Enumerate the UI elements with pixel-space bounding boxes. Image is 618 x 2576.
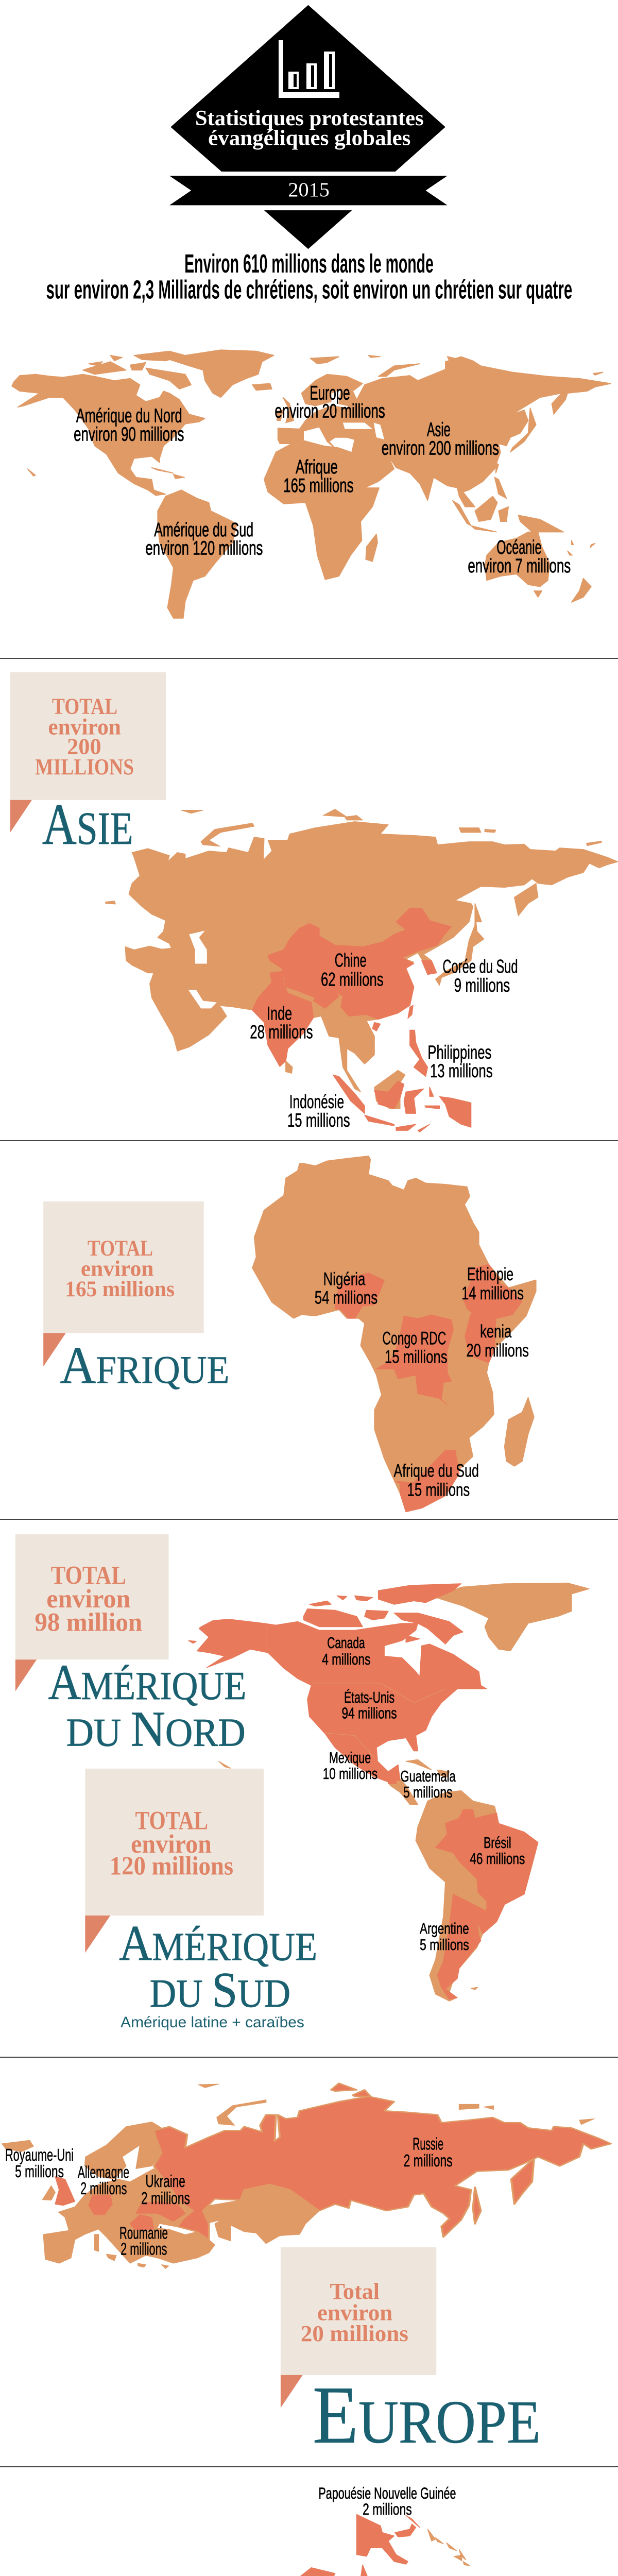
country labels: Amériques: 4 millions	[322, 1651, 370, 1669]
total box: Asie	[10, 672, 166, 833]
panel: Asie	[10, 672, 618, 1132]
world map shapes	[12, 350, 611, 618]
subheading: Amérique latine + caraïbes	[121, 2013, 304, 2031]
country labels: Afrique: 15 millions	[385, 1347, 448, 1367]
continent labels	[74, 382, 571, 577]
continent labels: Amérique du Sud	[154, 519, 253, 540]
panel: Afrique: 20 millions	[466, 1340, 529, 1361]
continent labels: environ 120 millions	[145, 537, 263, 559]
country labels: Europe: Ukraine	[145, 2172, 185, 2191]
country labels: Afrique: Afrique du Sud	[394, 1461, 479, 1481]
heading: Amérique du Sud: AMÉRIQUE	[119, 1915, 317, 1971]
country labels: Amériques: Brésil	[484, 1834, 511, 1852]
country labels: Asie: 62 millions	[321, 969, 384, 990]
total box: Amérique du Nord: environ	[46, 1584, 130, 1613]
country labels: Amériques: États-Unis	[344, 1689, 394, 1706]
country labels: Océanie: 2 millions	[363, 2501, 412, 2519]
country labels: Afrique: 15 millions	[407, 1480, 470, 1500]
country labels: Amériques: 94 millions	[342, 1705, 397, 1722]
country labels: Asie	[250, 950, 518, 1131]
title: Statistiques protestantes	[195, 106, 424, 130]
panel: Afrique	[43, 1156, 536, 1512]
country labels: Asie: 28 millions	[250, 1021, 313, 1043]
total box: Amérique du Nord: 98 million	[35, 1607, 142, 1637]
total box: Asie: MILLIONS	[35, 755, 134, 779]
total box: Amérique du Nord	[15, 1534, 169, 1691]
panel: world map	[12, 350, 611, 618]
country labels: Amériques: 5 millions	[420, 1936, 469, 1954]
heading: Amérique du Nord: AMÉRIQUE	[48, 1654, 246, 1710]
country labels: Europe: Allemagne	[78, 2163, 129, 2182]
total box: Amérique du Sud	[85, 1769, 264, 1953]
country labels: Europe: 2 millions	[80, 2179, 127, 2198]
country labels: Océanie: Papouésie Nouvelle Guinée	[318, 2485, 456, 2503]
country labels: Asie: Philippines	[427, 1042, 491, 1063]
icon: bar chart	[279, 40, 339, 98]
continent labels: environ 90 millions	[74, 423, 184, 445]
country labels: Asie: Chine	[335, 950, 367, 971]
total box: Afrique: environ	[81, 1257, 154, 1281]
total box: Amérique du Sud: 120 millions	[110, 1851, 233, 1880]
country labels: Europe: 2 millions	[141, 2189, 190, 2208]
total box: Asie: 200	[67, 734, 101, 759]
total box: Afrique: TOTAL	[88, 1236, 153, 1261]
total box: Afrique	[43, 1201, 204, 1366]
total box: Amérique du Sud: TOTAL	[135, 1806, 208, 1835]
country labels: Amériques	[322, 1634, 525, 1954]
country labels: Europe: 5 millions	[15, 2162, 64, 2181]
total box: Europe: Total	[330, 2279, 380, 2304]
continent labels: Océanie	[496, 536, 542, 558]
country labels: Amériques: Canada	[327, 1634, 365, 1652]
country labels: Europe	[5, 2134, 453, 2259]
bottom triangle	[264, 210, 352, 249]
Europe map	[2, 2083, 611, 2268]
country labels: Océanie	[299, 2485, 533, 2576]
panel: Amériques	[15, 1534, 589, 2031]
total box: Asie: environ	[48, 715, 121, 740]
country labels: Asie: 13 millions	[430, 1060, 493, 1082]
heading: Amérique du Sud	[119, 1915, 317, 2018]
panel: Océanie	[8, 2485, 563, 2576]
country labels: Europe: Roumanie	[119, 2224, 168, 2243]
panel: Afrique: 14 millions	[461, 1283, 524, 1303]
heading: Afrique: AFRIQUE	[60, 1335, 229, 1395]
country labels: Asie: Indonésie	[289, 1091, 344, 1113]
country labels: Afrique: Congo RDC	[382, 1328, 446, 1349]
continent labels: Asie	[427, 418, 451, 440]
country labels: Afrique: kenia	[480, 1321, 512, 1342]
continent labels: environ 20 millions	[274, 400, 385, 422]
heading: Amérique du Sud: DU SUD	[150, 1961, 290, 2018]
country labels: Amériques: 46 millions	[470, 1850, 525, 1868]
total box: Afrique: 165 millions	[65, 1277, 175, 1301]
total box: Europe: environ	[317, 2300, 392, 2325]
country labels: Afrique: 54 millions	[315, 1287, 377, 1308]
country labels: Afrique: Ethiopie	[467, 1264, 513, 1284]
country labels: Afrique: Nigéria	[323, 1269, 366, 1290]
continent labels: Amérique du Nord	[76, 405, 182, 427]
total box: Europe	[281, 2247, 436, 2408]
heading: Asie: ASIE	[42, 792, 133, 857]
year: 2015	[288, 179, 330, 201]
heading: Amérique du Nord: DU NORD	[66, 1701, 246, 1757]
Oceania map	[211, 2515, 563, 2576]
title: évangéliques globales	[208, 125, 410, 150]
panel: Europe: 2 millions	[404, 2151, 453, 2171]
country labels: Amériques: 10 millions	[323, 1765, 377, 1783]
header badge	[169, 5, 448, 249]
continent labels: 165 millions	[283, 474, 353, 496]
total box: Amérique du Sud: environ	[131, 1829, 212, 1858]
panel: Asie: Corée du Sud	[442, 956, 518, 977]
country labels: Amériques: Mexique	[329, 1749, 371, 1767]
Asia map	[106, 809, 618, 1132]
country labels: Asie: Inde	[267, 1003, 292, 1024]
Americas map	[188, 1583, 589, 2001]
heading: Amérique du Nord	[48, 1654, 246, 1757]
country labels: Europe: Russie	[413, 2134, 443, 2154]
total box: Europe: 20 millions	[301, 2321, 408, 2346]
headline	[46, 250, 572, 304]
total box: Amérique du Nord: TOTAL	[51, 1561, 126, 1590]
country labels: Asie: 9 millions	[454, 975, 510, 996]
panel: Europe	[2, 2083, 611, 2461]
country labels: Europe: 2 millions	[121, 2240, 167, 2259]
ribbon banner	[169, 176, 448, 205]
country labels: Amériques: Guatemala	[401, 1768, 456, 1786]
continent labels: Europe	[310, 382, 350, 404]
country labels: Amériques: Argentine	[420, 1920, 469, 1938]
continent labels: environ 7 millions	[468, 555, 571, 577]
continent labels: environ 200 millions	[382, 437, 499, 459]
total box: Asie: TOTAL	[52, 694, 117, 719]
country labels: Amériques: 5 millions	[403, 1784, 453, 1801]
continent labels: Afrique	[296, 456, 338, 478]
headline: Environ 610 millions dans le monde	[184, 250, 434, 278]
country labels: Asie: 15 millions	[287, 1110, 350, 1131]
diamond badge	[170, 5, 445, 172]
country labels: Europe: Royaume-Uni	[5, 2145, 74, 2165]
country labels: Afrique	[315, 1264, 529, 1500]
Africa map	[252, 1156, 536, 1512]
